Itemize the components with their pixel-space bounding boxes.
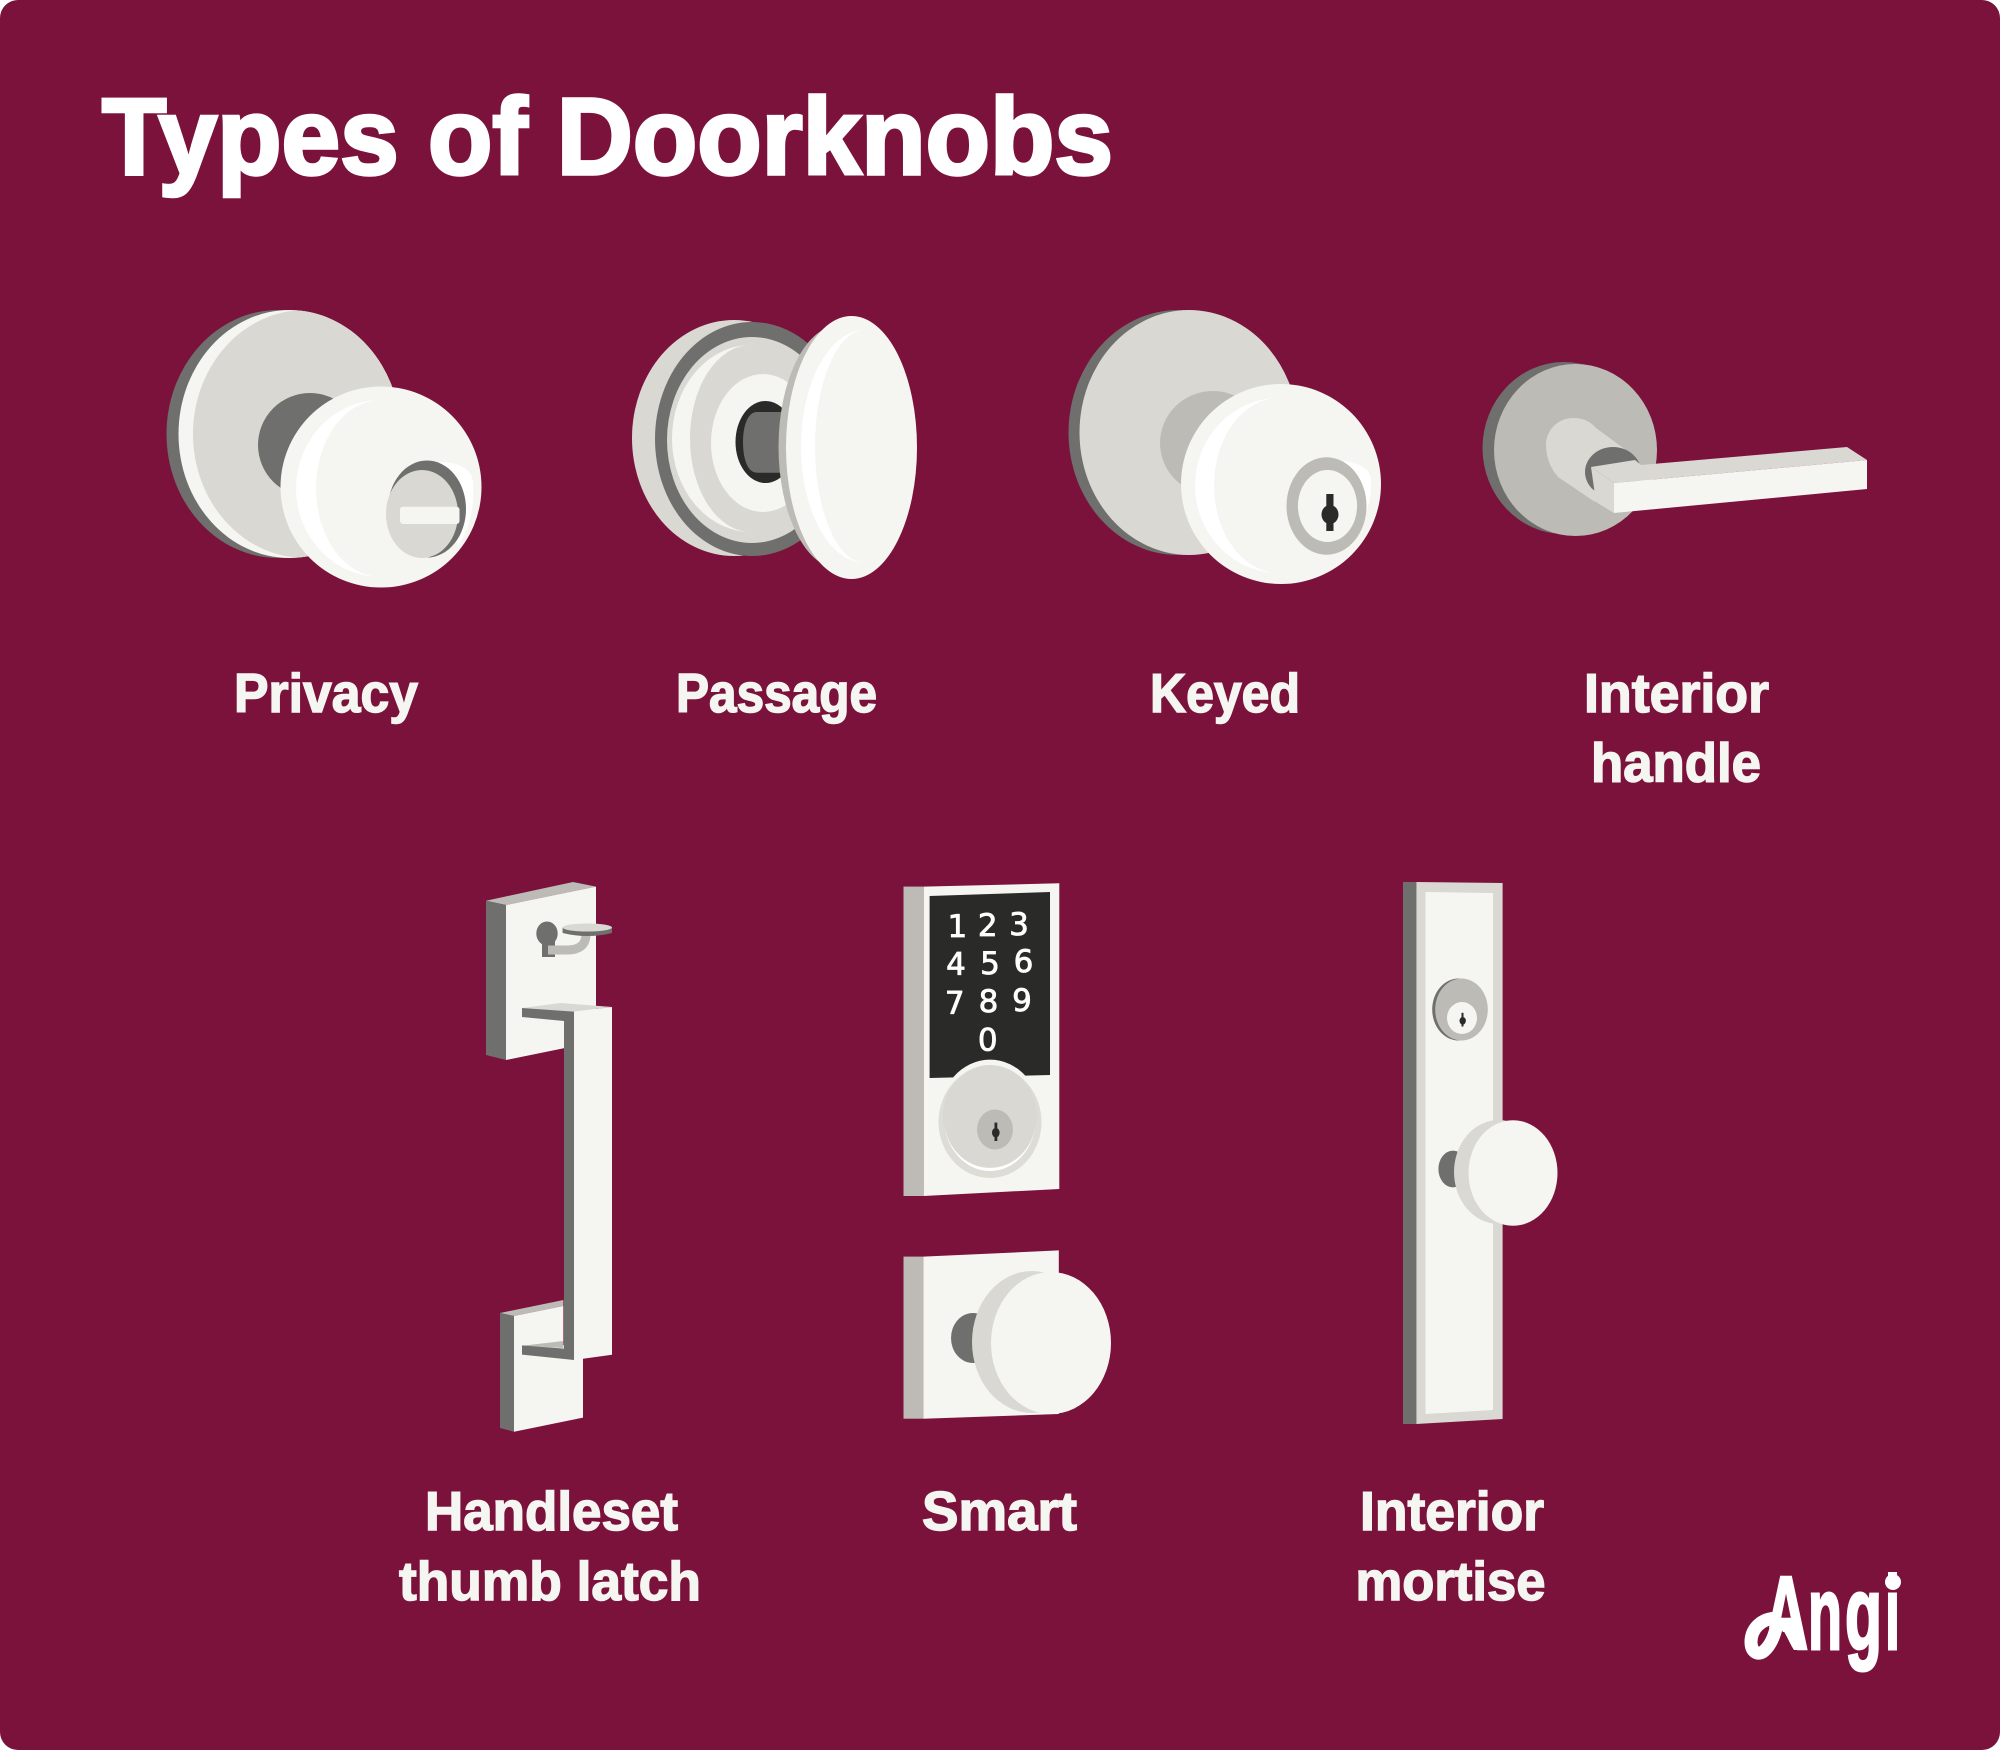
icon: keyed doorknob — [1068, 310, 1381, 584]
icon: smart lock knob — [904, 1250, 1111, 1419]
keypad digits: 9 — [1012, 983, 1032, 1019]
logo: Angi — [1751, 1556, 1901, 1672]
icon: interior handle — [1482, 362, 1867, 536]
keypad digits: 4 — [946, 947, 966, 983]
label: Smart: Smart — [922, 1480, 1077, 1542]
label: Interior mortise — [1356, 1480, 1546, 1612]
label: Interior handle: Interior — [1584, 662, 1769, 724]
label: Handleset thumb latch: thumb latch — [399, 1550, 701, 1612]
label: Privacy: Privacy — [234, 662, 418, 724]
keypad digits: 3 — [1009, 907, 1029, 943]
keypad digits: 0 — [978, 1022, 998, 1058]
keypad digits: 1 — [948, 909, 967, 945]
keypad digits: 6 — [1014, 944, 1033, 980]
keypad digits — [945, 907, 1033, 1058]
label: Handleset thumb latch: Handleset — [425, 1480, 678, 1542]
label: Keyed: Keyed — [1150, 662, 1300, 724]
logo: Angi: g — [1845, 1556, 1882, 1672]
label: Handleset thumb latch — [399, 1480, 701, 1612]
label: Interior handle: handle — [1591, 732, 1761, 794]
icon: interior mortise — [1403, 882, 1558, 1424]
keypad digits: 7 — [945, 986, 965, 1022]
icon: privacy doorknob — [166, 310, 482, 588]
icon: handleset thumb latch — [486, 882, 612, 1432]
title: Types of Doorknobs — [102, 76, 1113, 198]
label: Interior mortise: Interior — [1360, 1480, 1544, 1542]
logo: Angi: A — [1764, 1556, 1808, 1672]
icon: passage doorknob — [632, 316, 917, 579]
logo: Angi: n — [1808, 1556, 1842, 1672]
keypad digits: 8 — [979, 984, 998, 1020]
label: Interior mortise: mortise — [1356, 1550, 1546, 1612]
icon: smart lock keypad — [904, 883, 1059, 1196]
keypad digits: 2 — [978, 908, 998, 944]
label: Passage: Passage — [676, 662, 877, 724]
keypad digits: 5 — [980, 946, 1000, 982]
label: Interior handle — [1584, 662, 1769, 794]
logo: Angi: i — [1885, 1556, 1900, 1672]
